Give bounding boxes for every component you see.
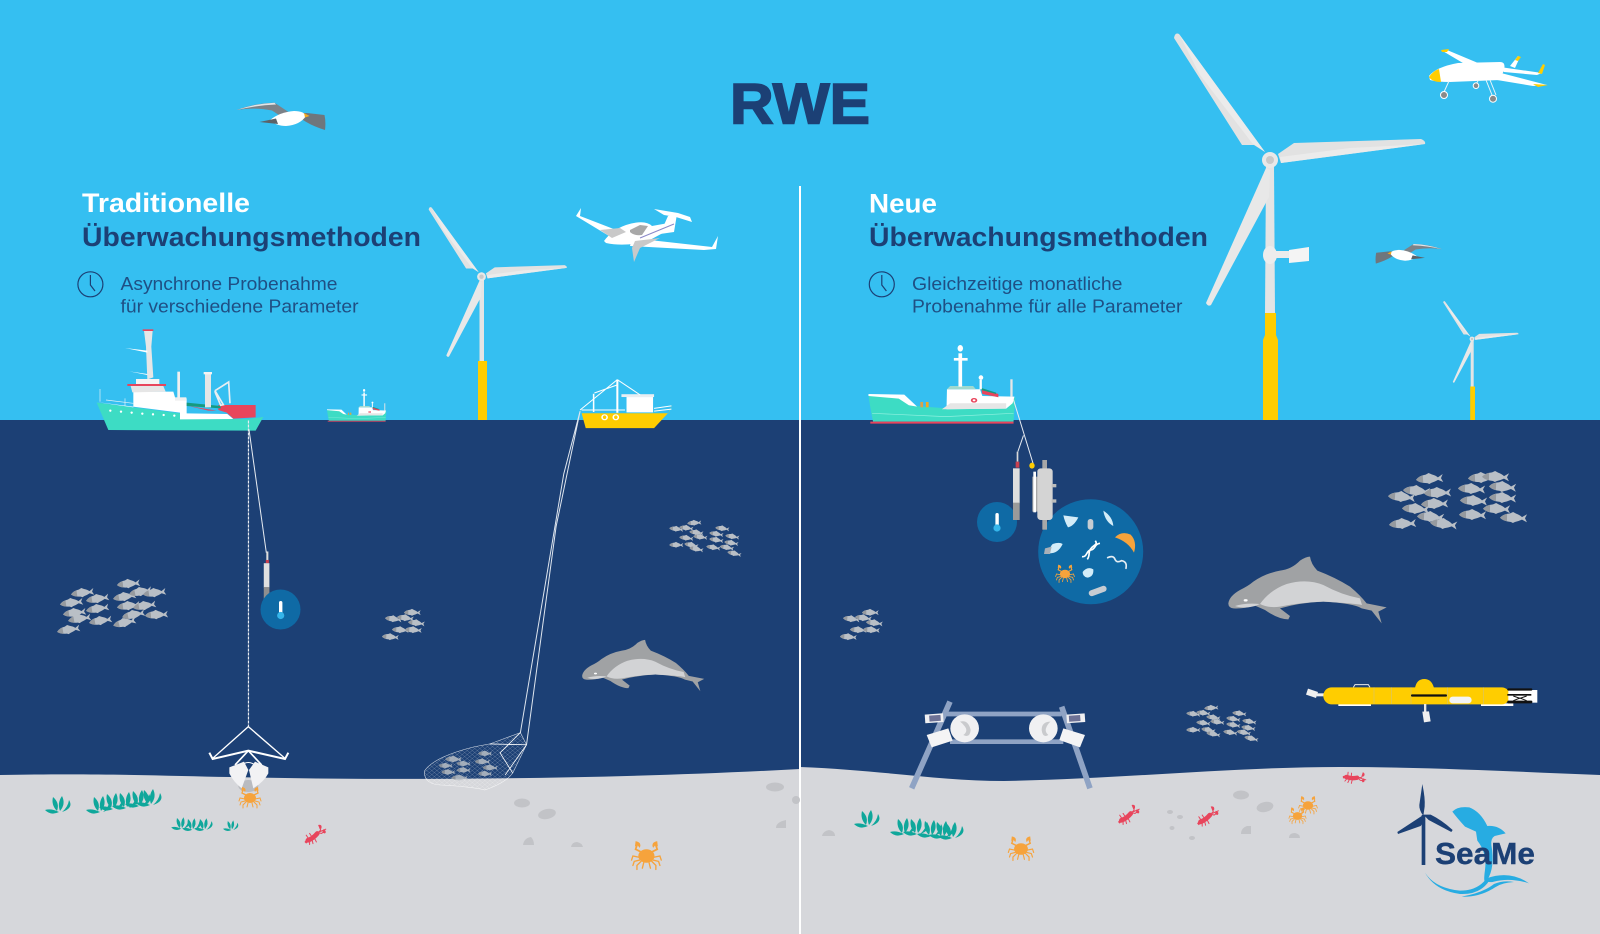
text: simultaneous sampling: [912, 273, 1182, 316]
seaweed right: [854, 810, 963, 840]
sky background: [0, 0, 1600, 421]
monitoring ship right: [868, 345, 1015, 424]
thermometer badge right: [977, 502, 1017, 542]
fish school near vehicle: [1186, 704, 1259, 743]
fish school large left: [56, 578, 168, 636]
text: asynchronous sampling: Asynchrone Probenahme: [120, 273, 338, 294]
heading: traditional methods: [82, 188, 421, 252]
research ship: [96, 329, 263, 431]
CTD probe right: [1013, 452, 1020, 520]
logo: RWE: RWE: [730, 72, 870, 136]
crab left: [632, 841, 661, 870]
wind turbine large right: [1174, 34, 1425, 420]
heading: new methods: Neue: [869, 188, 937, 218]
stones right: [822, 790, 1300, 840]
porpoise left: [582, 640, 704, 691]
divider: [799, 186, 801, 934]
fish school small left: [382, 609, 425, 641]
logo: SeaMe: [1397, 784, 1535, 897]
sea water: [0, 420, 1600, 820]
text: asynchronous sampling: für verschiedene Parameter: [120, 295, 358, 316]
text: simultaneous sampling: Gleichzeitige monatliche: [912, 273, 1122, 294]
grab sampler: [209, 727, 288, 792]
bio sample circle: [1038, 499, 1143, 604]
icon: clock right: [869, 272, 894, 297]
yellow fishing boat: [580, 380, 672, 428]
thermometer badge left: [260, 590, 300, 630]
logo: SeaMe: SeaMe: [1435, 836, 1535, 871]
heading: traditional methods: Überwachungsmethoden: [82, 222, 421, 252]
logo turbine: [1397, 784, 1453, 865]
distant teal ship: [327, 389, 386, 422]
drone: [1429, 49, 1548, 102]
porpoise right: [1228, 557, 1387, 623]
seagull left: [236, 103, 325, 130]
logo dolphin and waves: [1425, 807, 1529, 897]
wind turbine left: [429, 207, 567, 420]
text: simultaneous sampling: Probenahme für alle Parameter: [912, 295, 1182, 316]
water sampler rosette: [1029, 460, 1056, 530]
heading: new methods: [869, 188, 1208, 252]
bottom trawl net: [424, 411, 580, 790]
wind turbine small right: [1443, 301, 1519, 420]
heading: traditional methods: Traditionelle: [82, 188, 250, 218]
lobster left: [304, 825, 326, 844]
icon: clock left: [78, 272, 103, 297]
crab in grab: [239, 787, 261, 808]
plane: [576, 208, 718, 262]
CTD line and probe left: [248, 420, 269, 727]
sea floor: [0, 767, 1600, 934]
crabs and lobsters right: [1008, 764, 1369, 860]
fish school small right: [840, 609, 883, 641]
cable from ship right: [1013, 399, 1033, 464]
fish school upper left panel: [669, 519, 742, 558]
heading: new methods: Überwachungsmethoden: [869, 222, 1208, 252]
camera on tower: [1263, 246, 1309, 264]
seagull right: [1376, 244, 1442, 264]
fish school upper right: [1388, 471, 1527, 530]
autonomous underwater vehicle: [1306, 679, 1537, 722]
camera frame on seabed: [912, 702, 1090, 788]
seaweed left: [45, 789, 238, 831]
text: asynchronous sampling: [120, 273, 358, 316]
stones left: [514, 782, 800, 847]
